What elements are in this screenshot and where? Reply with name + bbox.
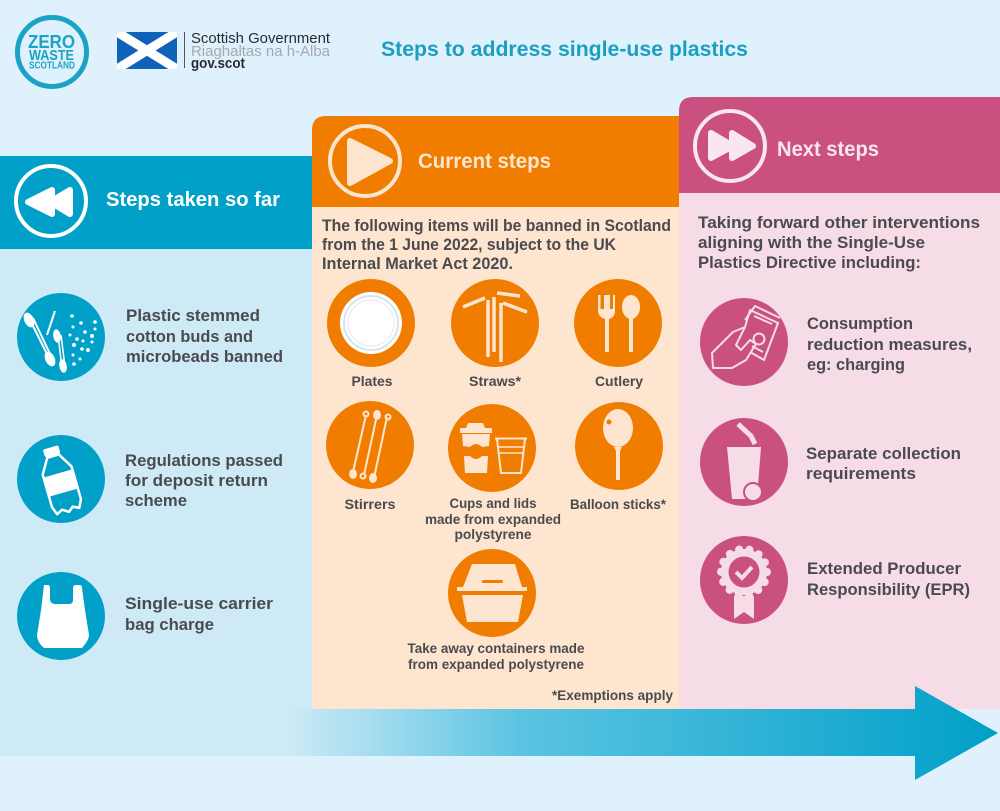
- logo: Scottish Government: Riaghaltas na h-Alba: [191, 43, 331, 60]
- icon: take away container: [448, 549, 536, 637]
- icon: stirrers: [326, 401, 414, 489]
- panel: steps taken so far: [0, 156, 312, 709]
- text: EPR: Extended Producer: [807, 560, 962, 578]
- arrow: timeline: [0, 686, 998, 780]
- label: cutlery: Cutlery: [595, 374, 644, 389]
- logo: Zero Waste Scotland: [18, 18, 86, 86]
- logo: Scottish Government: gov.scot: [191, 55, 245, 72]
- panel: current steps: [312, 116, 679, 709]
- text: charging: reduction measures,: [807, 336, 972, 354]
- text: cotton buds: Plastic stemmed: [126, 307, 260, 325]
- label: take away container: Take away containers made: [408, 641, 585, 656]
- text: carrier bag: Single-use carrier: [125, 595, 274, 613]
- icon: cups: [448, 404, 536, 492]
- text: bin: Separate collection: [806, 445, 961, 463]
- label: take away container: [408, 641, 585, 672]
- label: plates: Plates: [352, 374, 392, 389]
- icon: straws: [451, 279, 539, 367]
- text: bin: requirements: [806, 465, 916, 483]
- icon: rosette: [700, 536, 788, 624]
- header: steps taken so far: [0, 156, 312, 249]
- text: deposit return: Regulations passed: [125, 452, 283, 470]
- text: deposit return: scheme: [125, 492, 187, 510]
- logo: Scottish Government: [117, 30, 331, 72]
- logo: Zero Waste Scotland: SCOTLAND: [29, 60, 75, 72]
- title: Steps to address single-use plastics: [381, 37, 748, 61]
- intro text: The following items will be banned in Scotland: [322, 217, 671, 235]
- text: carrier bag: bag charge: [125, 616, 214, 634]
- item: bottle: [17, 435, 105, 523]
- logo: Zero Waste Scotland: WASTE: [29, 47, 74, 64]
- label: stirrers: Stirrers: [344, 497, 396, 512]
- intro text: [698, 214, 980, 272]
- icon: cutlery: [574, 279, 662, 367]
- label: balloon: Balloon sticks*: [570, 497, 667, 512]
- logo: Scottish Government: Scottish Government: [191, 30, 331, 47]
- label: cups: [425, 496, 561, 542]
- icon: balloon: [575, 402, 663, 490]
- intro text: Internal Market Act 2020.: [322, 255, 513, 273]
- header: steps taken so far: Steps taken so far: [106, 188, 280, 211]
- label: cups: Cups and lids: [450, 496, 536, 511]
- text: cotton buds: [126, 307, 283, 366]
- text: charging: Consumption: [807, 315, 913, 333]
- text: deposit return: for deposit return: [125, 472, 268, 490]
- intro text: Taking forward other interventions: [698, 214, 980, 232]
- text: charging: eg: charging: [807, 356, 905, 374]
- panel: next steps: [679, 97, 1000, 709]
- text: deposit return: [125, 452, 283, 510]
- label: cups: made from expanded: [425, 512, 561, 527]
- intro text: from the 1 June 2022, subject to the UK: [322, 236, 616, 254]
- header: current steps: Current steps: [418, 150, 551, 173]
- text: EPR: Responsibility (EPR): [807, 581, 970, 599]
- header: next steps: Next steps: [777, 138, 879, 161]
- footnote: *Exemptions apply: [552, 688, 673, 703]
- item: carrier bag: [17, 572, 105, 660]
- text: charging: [807, 315, 972, 374]
- logo: Zero Waste Scotland: ZERO: [28, 32, 75, 52]
- header: next steps: [679, 97, 1000, 193]
- icon: bin: [700, 418, 788, 506]
- text: EPR: [807, 560, 970, 599]
- header: current steps: [312, 116, 679, 207]
- label: cups: polystyrene: [454, 527, 532, 542]
- icon: plates: [327, 279, 415, 367]
- intro text: Plastics Directive including:: [698, 254, 921, 272]
- text: cotton buds: microbeads banned: [126, 348, 283, 366]
- label: straws: Straws*: [469, 374, 522, 389]
- label: take away container: from expanded polystyrene: [408, 657, 584, 672]
- text: bin: [806, 445, 961, 483]
- item: cotton buds: [17, 293, 105, 381]
- text: cotton buds: cotton buds and: [126, 328, 253, 346]
- icon: charging: [700, 298, 788, 386]
- intro text: aligning with the Single-Use: [698, 234, 925, 252]
- text: carrier bag: [125, 595, 274, 634]
- intro text: [322, 217, 671, 273]
